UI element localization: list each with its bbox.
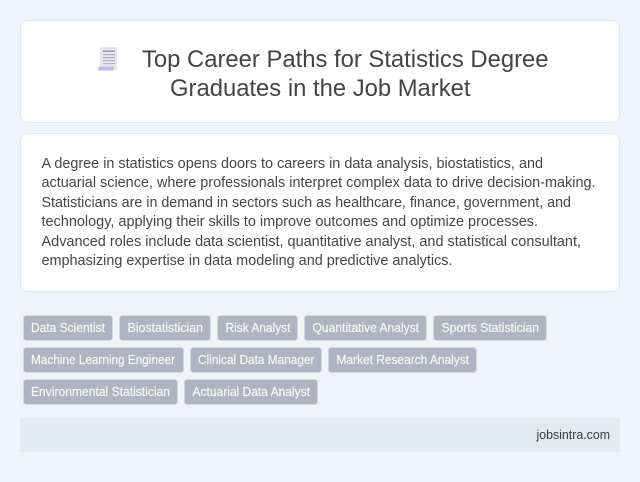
tag: Data Scientist (24, 316, 112, 340)
tag: Environmental Statistician: Environmental Statistician (31, 385, 170, 399)
description text: actuarial science, where professionals interpret complex data to drive decision-making. (42, 175, 596, 191)
tag: Sports Statistician (434, 316, 546, 340)
description text: Advanced roles include data scientist, quantitative analyst, and statistical consultant, (42, 234, 581, 250)
title (142, 46, 548, 102)
tag: Quantitative Analyst (304, 316, 426, 340)
description text: emphasizing expertise in data modeling and predictive analytics. (42, 253, 452, 269)
tag: Environmental Statistician (24, 380, 178, 404)
tag: Risk Analyst: Risk Analyst (226, 321, 291, 335)
description text (42, 156, 596, 269)
footer source text: jobsintra.com (536, 428, 610, 442)
tag: Actuarial Data Analyst: Actuarial Data Analyst (192, 385, 310, 399)
tag: Clinical Data Manager (190, 348, 322, 372)
tag: Quantitative Analyst: Quantitative Analyst (312, 321, 420, 335)
tag: Clinical Data Manager: Clinical Data Manager (198, 353, 314, 367)
panel: header (20, 20, 620, 122)
tag: Market Research Analyst: Market Research Analyst (336, 353, 469, 367)
title: Graduates in the Job Market (170, 75, 471, 102)
tag: Risk Analyst (218, 316, 298, 340)
description text: A degree in statistics opens doors to careers in data analysis, biostatistics, and (42, 156, 543, 172)
tag: Biostatistician (120, 316, 210, 340)
tag: Sports Statistician: Sports Statistician (442, 321, 539, 335)
tag: Machine Learning Engineer: Machine Learning Engineer (31, 353, 175, 367)
tag: Market Research Analyst (328, 348, 476, 372)
tag: Data Scientist: Data Scientist (31, 321, 105, 335)
tag: Actuarial Data Analyst (184, 380, 318, 404)
description text: Statisticians are in demand in sectors such as healthcare, finance, government, and (42, 195, 571, 211)
tag: Biostatistician: Biostatistician (128, 321, 203, 335)
description text: technology, applying their skills to improve outcomes and optimize processes. (42, 214, 538, 230)
tag list (24, 316, 546, 404)
footer bar (20, 418, 620, 452)
tag: Machine Learning Engineer (24, 348, 184, 372)
title: Top Career Paths for Statistics Degree (142, 46, 548, 73)
icon: document scroll (98, 47, 117, 70)
panel: description (20, 134, 620, 292)
